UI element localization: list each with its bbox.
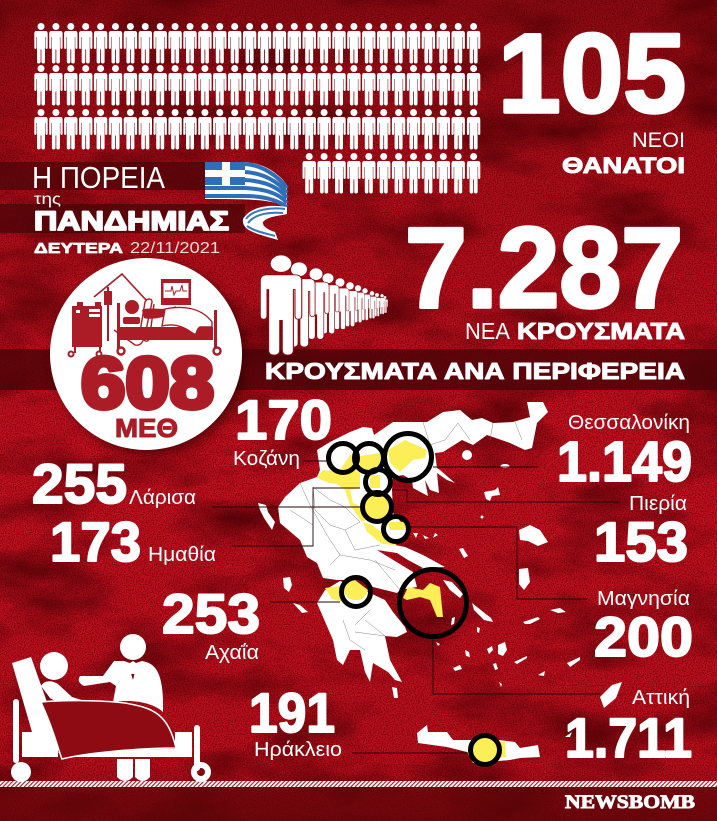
headline: 7.287 new cases: 7.287 bbox=[405, 205, 683, 332]
headline: 105 new deaths: 105 bbox=[498, 11, 686, 136]
headline: 7.287 new cases: ΚΡΟΥΣΜΑΤΑ bbox=[517, 318, 685, 344]
label: Heraklion: Ηράκλειο bbox=[254, 739, 342, 761]
callout rings bbox=[328, 434, 500, 764]
label: Larisa bbox=[32, 452, 196, 515]
label: Attica: 1.711 bbox=[565, 706, 692, 769]
title text: ΔΕΥΤΕΡΑ bbox=[34, 240, 123, 257]
highlighted fills inside rings bbox=[344, 494, 498, 763]
title text bbox=[32, 160, 229, 257]
Evia and Peloponnese bbox=[443, 580, 463, 598]
ICU count: 608 bbox=[81, 344, 214, 424]
headline: 105 new deaths: ΘΑΝΑΤΟΙ bbox=[562, 153, 685, 178]
label: Magnesia: 200 bbox=[594, 605, 693, 668]
label: Larisa: 255 bbox=[32, 452, 127, 515]
label: Pieria: Πιερία bbox=[629, 493, 687, 515]
label: Imathia: Ημαθία bbox=[148, 544, 216, 566]
badge disc bbox=[50, 258, 242, 450]
title text: Η ΠΟΡΕΙΑ bbox=[32, 160, 165, 195]
label: Achaia: 253 bbox=[162, 582, 260, 645]
logo: Newsbomb: NEWSBOMB bbox=[565, 792, 695, 813]
title block bbox=[0, 160, 287, 257]
regional heading: ΚΡΟΥΣΜΑΤΑ ΑΝΑ ΠΕΡΙΦΕΡΕΙΑ bbox=[265, 358, 685, 384]
icon: queue of people bbox=[260, 255, 388, 355]
icons: 105 deaths pictogram bbox=[34, 23, 480, 194]
headline: 7.287 new cases: ΝΕΑ bbox=[465, 318, 511, 344]
label: Imathia: 173 bbox=[50, 510, 141, 573]
title text: 22/11/2021 bbox=[130, 240, 220, 257]
label: Achaia: Αχαΐα bbox=[205, 642, 259, 664]
headline: 105 new deaths: ΝΕΟΙ bbox=[632, 129, 685, 152]
leader lines bbox=[212, 461, 620, 753]
prefecture borders bbox=[290, 422, 522, 650]
title bands bbox=[0, 162, 245, 233]
ICU badge bbox=[50, 258, 246, 454]
islands bbox=[258, 450, 622, 737]
icon: Greek flag ribbon bbox=[205, 162, 287, 240]
title text: ΠΑΝΔΗΜΙΑΣ bbox=[34, 206, 229, 236]
label: Magnesia: Μαγνησία bbox=[597, 588, 690, 610]
label: Imathia bbox=[50, 510, 216, 573]
mainland bbox=[278, 402, 548, 593]
label: Thessaloniki: Θεσσαλονίκη bbox=[568, 412, 690, 434]
label: Pieria: 153 bbox=[594, 510, 688, 573]
ICU count: ΜΕΘ bbox=[115, 413, 178, 443]
map of Greece bbox=[212, 402, 622, 764]
dark band behind regional heading bbox=[0, 349, 717, 390]
Crete bbox=[417, 725, 540, 763]
badge shadow bbox=[54, 262, 246, 454]
label: Kozani: Κοζάνη bbox=[233, 448, 300, 470]
title text: της bbox=[34, 191, 61, 208]
icon: ICU bed with monitor bbox=[68, 274, 220, 356]
label: Attica: Αττική bbox=[632, 687, 690, 709]
hatched footer strip bbox=[0, 781, 717, 821]
label: Heraklion: 191 bbox=[249, 681, 335, 744]
label: Kozani: 170 bbox=[235, 388, 332, 451]
icon: patient in bed with doctor bbox=[11, 634, 208, 782]
label: Thessaloniki: 1.149 bbox=[557, 430, 692, 494]
label: Larisa: Λάρισα bbox=[129, 487, 196, 509]
highlighted prefectures bbox=[317, 440, 506, 761]
